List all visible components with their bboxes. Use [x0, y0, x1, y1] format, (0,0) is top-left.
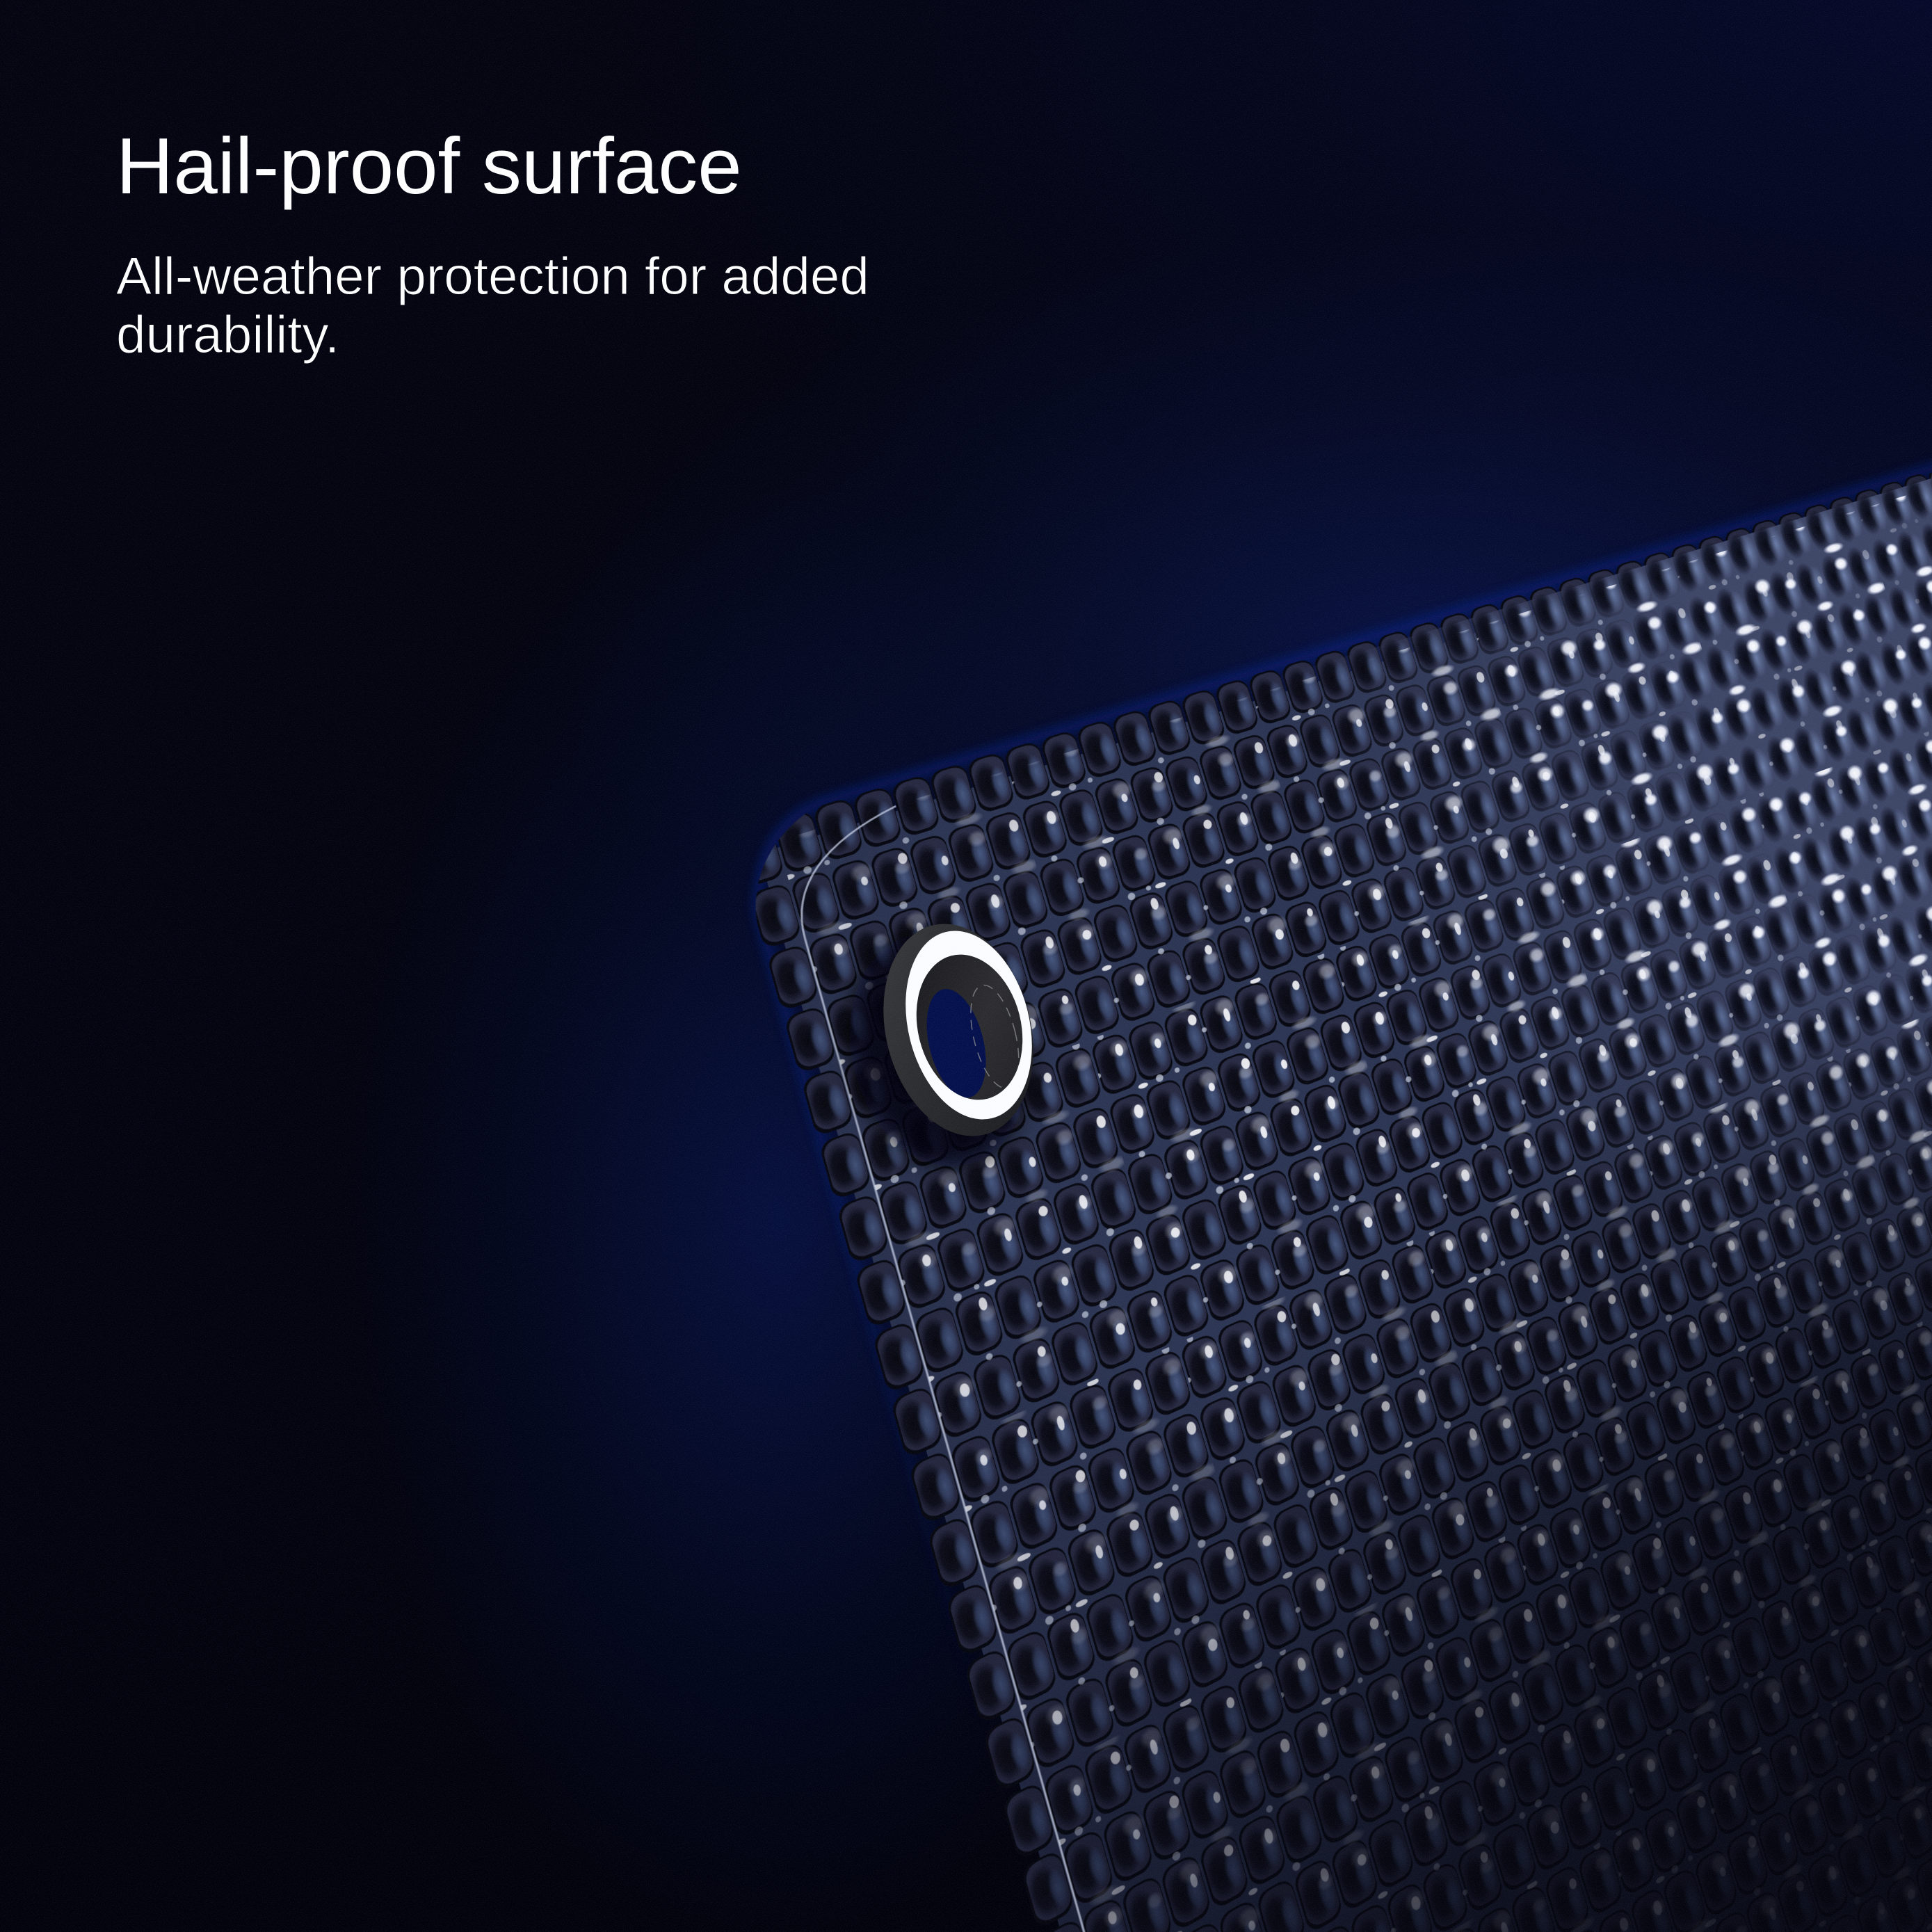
- body text: [116, 247, 869, 364]
- title: Hail-proof surface: [116, 122, 742, 211]
- body text: All-weather protection for added: [116, 247, 869, 306]
- studded surface: [730, 455, 1932, 1932]
- panel: studded hail-proof mat in perspective: [755, 473, 1932, 1932]
- body text: durability.: [116, 305, 339, 364]
